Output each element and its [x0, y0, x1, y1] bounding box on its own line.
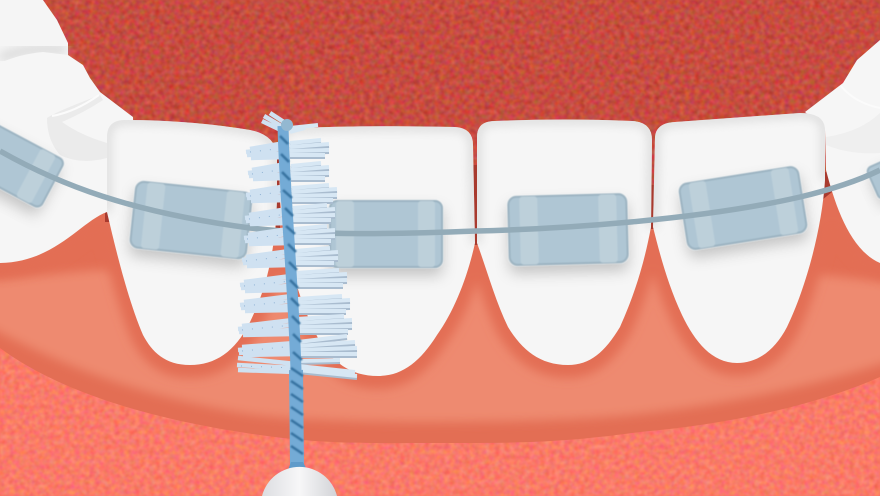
interdental brush [237, 113, 357, 496]
bracket tooth 4 [679, 166, 807, 250]
tooth 4 [653, 113, 825, 363]
tooth 1 [107, 120, 277, 365]
core twist marks [280, 136, 303, 454]
tooth 2 [279, 126, 475, 376]
bracket far left [0, 107, 65, 209]
dark gaps between teeth [105, 150, 832, 245]
brush top loop [281, 119, 293, 131]
bristle speckles [241, 148, 296, 368]
lower lip background [0, 300, 880, 496]
twisted wire core [283, 126, 297, 465]
arch wire [0, 151, 880, 234]
bracket tooth 3 [508, 194, 628, 265]
bristles right [290, 125, 357, 376]
bracket tooth 1 [130, 181, 252, 259]
lower gum [0, 192, 880, 444]
brush handle ball [262, 467, 337, 496]
upper right tooth [805, 40, 880, 263]
upper gum background [0, 0, 880, 300]
bristles right shadow [290, 142, 357, 378]
bristles left [237, 113, 296, 372]
lower rope core [296, 370, 297, 465]
upper left tooth [0, 0, 68, 90]
bracket far right [866, 140, 880, 200]
left molar [0, 52, 135, 263]
brush ferrule [288, 462, 307, 470]
bracket tooth 2 [330, 201, 442, 267]
tooth 3 [477, 120, 652, 365]
